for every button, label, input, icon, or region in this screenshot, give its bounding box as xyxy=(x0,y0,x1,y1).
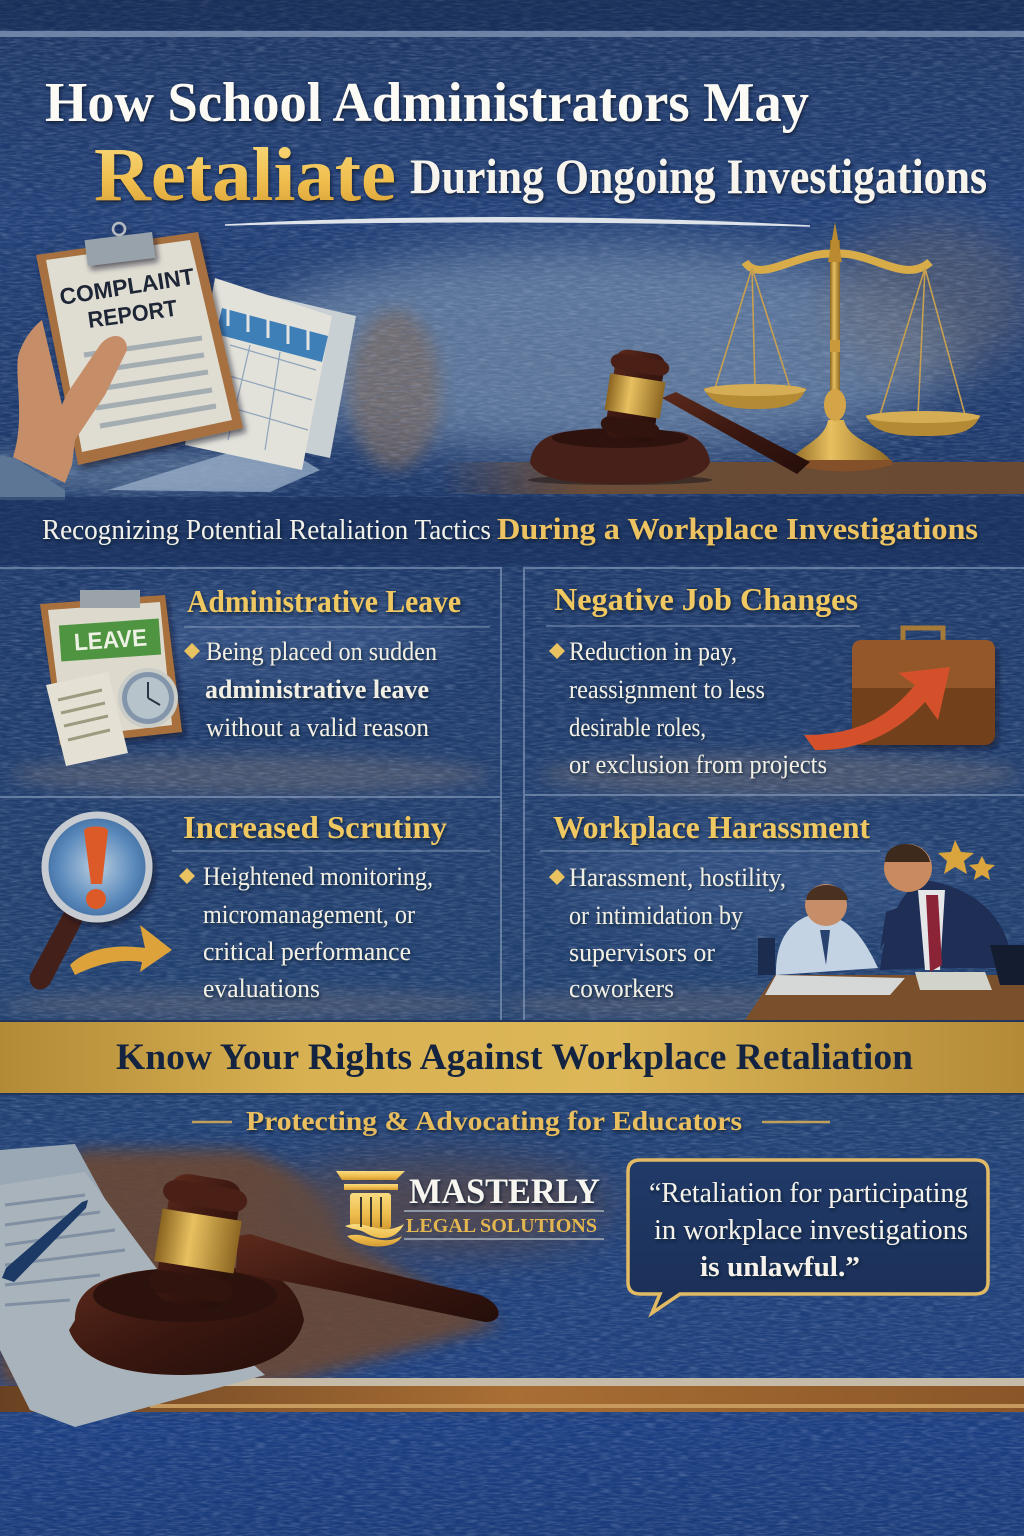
subheading band xyxy=(0,497,1024,565)
panel: administrative leave xyxy=(40,583,490,766)
illustration: wooden table top xyxy=(440,462,1024,494)
banner: know your rights xyxy=(0,1020,1024,1095)
text: workplace harassment description: supervisors or xyxy=(569,938,715,967)
text: negative job changes description: or exclusion from projects xyxy=(569,750,827,779)
illustration: gavel and sound block xyxy=(528,347,810,485)
text: legal solutions: LEGAL SOLUTIONS xyxy=(406,1215,597,1237)
illustration: papers and pen xyxy=(0,1144,265,1427)
illustration: calendar papers xyxy=(108,278,356,492)
panel: increased scrutiny xyxy=(30,809,490,1003)
panel: workplace harassment xyxy=(540,809,1024,1020)
callout: quote: “Retaliation for participating xyxy=(649,1178,968,1209)
text: administrative leave description: Being placed on sudden xyxy=(206,637,437,666)
banner: know your rights: Know Your Rights Against Workplace Retaliation xyxy=(116,1037,913,1078)
subheading: protecting and advocating: Protecting & Advocating for Educators xyxy=(246,1106,742,1136)
subheading band: Recognizing Potential Retaliation Tactics xyxy=(42,514,491,546)
illustration: wooden desk surface xyxy=(0,1150,610,1385)
text: increased scrutiny description: Heightened monitoring, xyxy=(203,862,433,891)
text: workplace harassment description: Harassment, hostility, xyxy=(569,863,786,892)
callout: quote: is unlawful.” xyxy=(700,1252,860,1283)
illustration: scales of justice xyxy=(704,222,980,472)
icon: bullet diamond xyxy=(179,868,195,884)
icon: bullet diamond xyxy=(549,869,565,885)
title: How School Administrators May xyxy=(45,72,809,134)
text: negative job changes description xyxy=(569,637,827,779)
title underline xyxy=(225,218,810,226)
icon: pillar xyxy=(336,1171,405,1246)
illustration: hand holding clipboard: COMPLAINT xyxy=(58,263,196,310)
panel frame lines xyxy=(0,568,1024,1020)
illustration: large wood strip xyxy=(0,1378,1024,1412)
heading: negative job changes: Negative Job Changes xyxy=(554,581,858,617)
heading: increased scrutiny: Increased Scrutiny xyxy=(183,809,447,845)
text: administrative leave description xyxy=(205,637,437,742)
subheading band: During a Workplace Investigations xyxy=(497,511,978,546)
icon: leave clipboard xyxy=(40,590,182,766)
illustration: hand holding clipboard xyxy=(0,223,243,500)
icon: bullet diamond xyxy=(549,643,565,659)
panel: negative job changes xyxy=(546,581,995,779)
heading: workplace harassment: Workplace Harassment xyxy=(553,809,870,845)
title: Retaliate xyxy=(94,133,396,217)
logo: masterly legal solutions xyxy=(336,1171,604,1246)
text: workplace harassment description: coworkers xyxy=(569,974,674,1003)
heading: administrative leave: Administrative Leave xyxy=(187,583,461,619)
icon: magnifying glass with warning xyxy=(30,815,172,990)
text: increased scrutiny description: micromanagement, or xyxy=(203,900,415,929)
callout: quote: in workplace investigations xyxy=(654,1215,968,1246)
text: masterly: MASTERLY xyxy=(409,1171,600,1211)
icon: leave clipboard: LEAVE xyxy=(73,624,148,656)
title xyxy=(45,72,987,217)
text: administrative leave description: administrative leave xyxy=(205,675,429,704)
illustration: angry boss and employee xyxy=(745,840,1024,1020)
text: administrative leave description: without a valid reason xyxy=(206,713,429,742)
callout: quote xyxy=(628,1160,988,1313)
text: increased scrutiny description: critical performance xyxy=(203,937,411,966)
illustration: hand holding clipboard: REPORT xyxy=(86,295,179,333)
icon: briefcase with arrow xyxy=(804,628,995,750)
icon: bullet diamond xyxy=(184,643,200,659)
text: increased scrutiny description xyxy=(203,862,433,1003)
text: negative job changes description: reassignment to less xyxy=(569,675,765,704)
text: increased scrutiny description: evaluations xyxy=(203,974,320,1003)
text: workplace harassment description: or intimidation by xyxy=(569,901,743,930)
illustration: large gavel xyxy=(69,1171,499,1375)
text: workplace harassment description xyxy=(569,863,786,1003)
text: negative job changes description: desirable roles, xyxy=(569,713,706,742)
text: negative job changes description: Reduction in pay, xyxy=(569,637,737,666)
